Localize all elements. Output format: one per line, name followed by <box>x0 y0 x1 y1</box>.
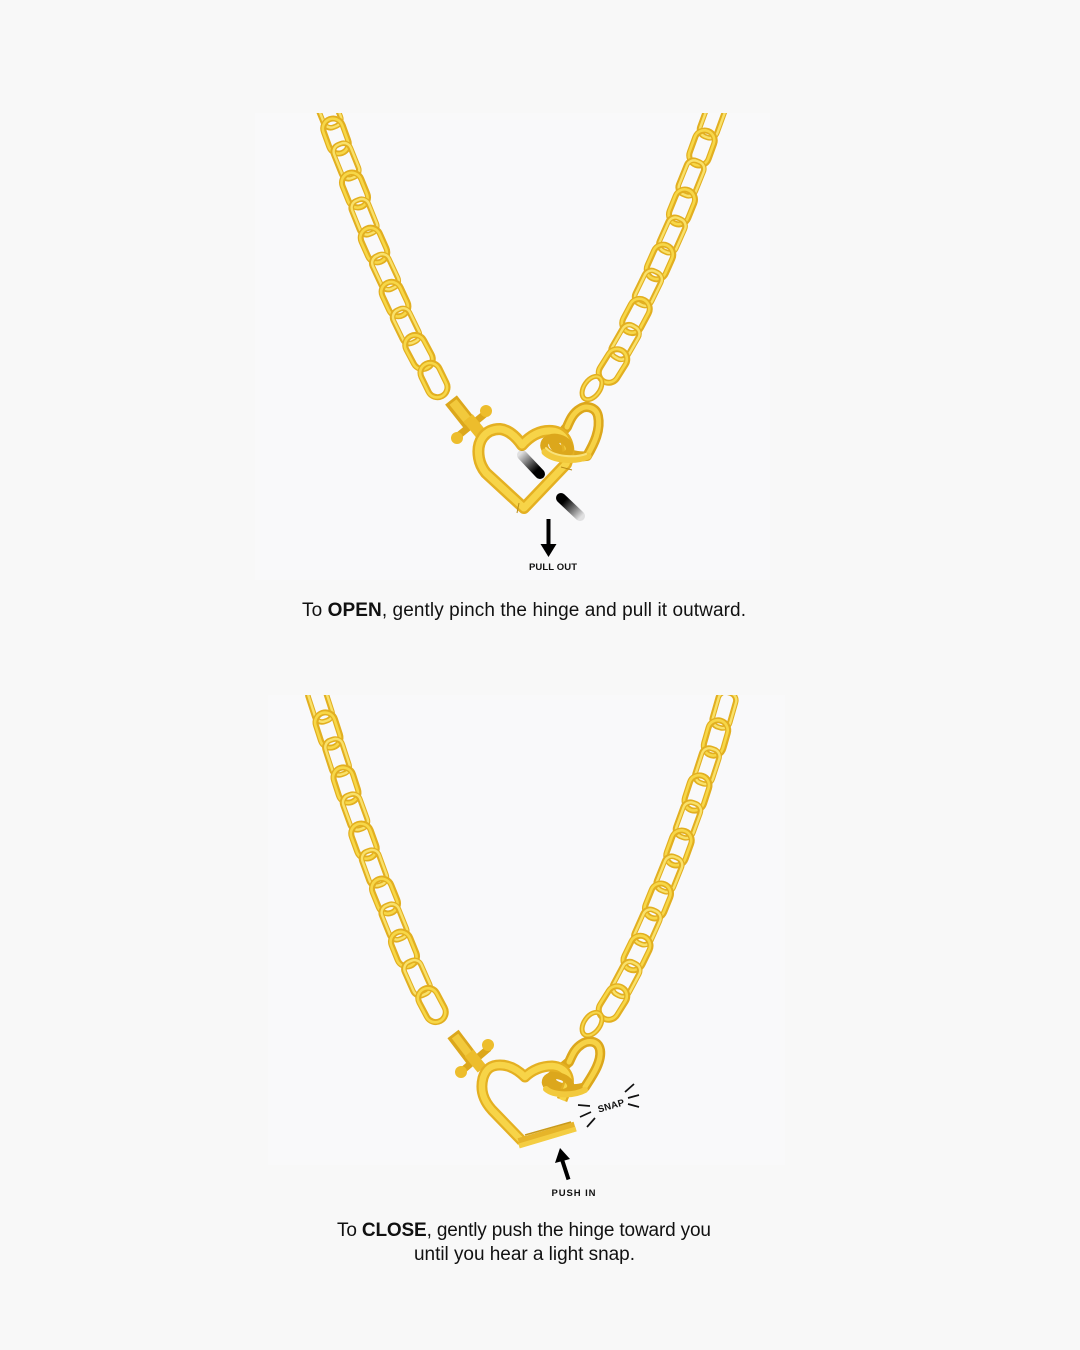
interlocking ring, close step <box>543 1073 585 1095</box>
caption: open instruction: To OPEN, gently pinch the hinge and pull it outward. <box>302 600 746 621</box>
arrow: pull out <box>540 519 556 557</box>
label: push in: PUSH IN <box>552 1188 596 1199</box>
arrow: push in <box>555 1148 570 1180</box>
caption: close instruction: until you hear a light snap. <box>414 1244 635 1265</box>
panel: open step photo <box>316 113 727 570</box>
chain: left strand, open step <box>313 90 451 401</box>
caption: close instruction <box>337 1220 711 1265</box>
chain: right strand, close step <box>595 690 738 1024</box>
snap burst lines <box>578 1084 639 1127</box>
caption: close instruction: To CLOSE, gently push the hinge toward you <box>337 1220 711 1241</box>
panel: close step photo <box>305 695 739 1196</box>
small heart clasp, open step <box>554 373 606 456</box>
interlocking ring, open step <box>542 435 588 459</box>
large heart clasp with hinge, open step <box>451 400 572 513</box>
small heart clasp, close step <box>550 1009 606 1089</box>
label: snap: SNAP <box>597 1097 626 1115</box>
hinge arm swung open, close step <box>519 1122 576 1146</box>
label: pull out: PULL OUT <box>529 562 577 573</box>
large heart clasp with hinge, close step <box>453 1034 568 1141</box>
chain: right strand, open step <box>595 100 727 387</box>
chain: left strand, close step <box>306 684 449 1026</box>
pinch marks, open step <box>522 455 580 516</box>
